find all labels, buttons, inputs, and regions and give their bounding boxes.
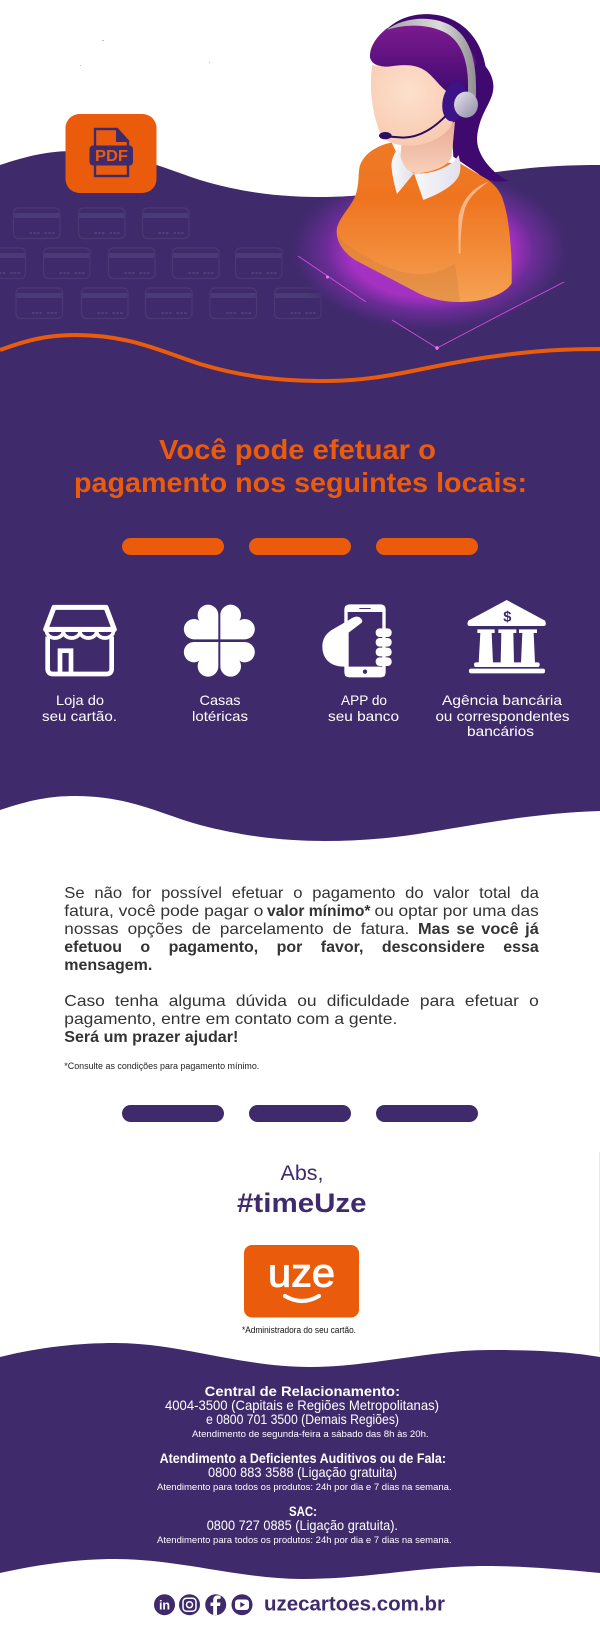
headset ear cup bbox=[454, 92, 478, 118]
title bbox=[74, 434, 527, 498]
text block: payment message: Caso tenha alguma dúvida ou dificuldade para efetuar o bbox=[64, 993, 539, 1010]
contact: central de relacionamento: Central de Relacionamento: bbox=[205, 1383, 400, 1399]
text block: payment message: nossas opções de parcelamento de fatura. bbox=[64, 921, 409, 938]
icon: bank bbox=[467, 600, 546, 673]
logo: uze bbox=[244, 1245, 359, 1318]
text block: payment message: Mas se você já bbox=[418, 921, 539, 938]
attendant front hair bbox=[370, 25, 477, 93]
stray pixels bbox=[80, 40, 210, 66]
PDF icon: PDF bbox=[95, 148, 128, 165]
sign-off: #timeUze bbox=[237, 1188, 367, 1218]
label: loja bbox=[42, 692, 117, 724]
headset band bbox=[387, 19, 476, 97]
background pattern: credit cards bbox=[0, 208, 321, 318]
icon: facebook bbox=[205, 1594, 226, 1615]
contact: deficientes auditivos: 0800 883 3588 (Ligação gratuita) bbox=[208, 1464, 397, 1480]
label: casas lotericas bbox=[192, 692, 248, 724]
icon: store bbox=[43, 607, 117, 674]
logo: uze: uze bbox=[268, 1252, 335, 1296]
logo caption: *Administradora do seu cartão. bbox=[242, 1325, 356, 1335]
attendant neck bbox=[400, 122, 455, 173]
label: agencia: bancários bbox=[467, 723, 534, 739]
label: agencia bbox=[436, 692, 570, 739]
attendant sleeve highlight bbox=[458, 182, 489, 253]
icon: youtube bbox=[232, 1594, 252, 1615]
label: app bbox=[328, 692, 399, 724]
illustration: call-center attendant with headset bbox=[337, 14, 512, 302]
label: agencia: ou correspondentes bbox=[436, 708, 570, 724]
attendant sweater shadow bbox=[337, 232, 460, 302]
attendant collar bbox=[391, 147, 460, 200]
contact: central de relacionamento: Atendimento de segunda-feira a sábado das 8h às 20h. bbox=[192, 1429, 429, 1440]
panel: contact footer bbox=[0, 1343, 600, 1579]
right edge hairline bbox=[599, 1152, 600, 1352]
text block: payment message: ou optar por uma das bbox=[374, 903, 539, 920]
footnote: *Consulte as condições para pagamento mínimo. bbox=[64, 1061, 259, 1071]
text block: payment message bbox=[64, 885, 539, 1046]
label: agencia: Agência bancária bbox=[442, 692, 562, 708]
orange pill dividers bbox=[122, 538, 478, 555]
text block: payment message: fatura, você pode pagar o bbox=[64, 903, 263, 920]
text block: payment message: Se não for possível efetuar o pagamento do valor total da bbox=[64, 885, 539, 902]
label: app: seu banco bbox=[328, 708, 399, 724]
sign-off bbox=[237, 1162, 367, 1218]
magenta diamond lines bbox=[298, 256, 564, 350]
contact: central de relacionamento: 4004-3500 (Capitais e Regiões Metropolitanas) bbox=[165, 1397, 439, 1413]
contact: SAC: Atendimento para todos os produtos: 24h por dia e 7 dias na semana. bbox=[157, 1535, 452, 1546]
label: loja: seu cartão. bbox=[42, 708, 117, 724]
text block: payment message: valor mínimo* bbox=[267, 903, 371, 920]
contact: SAC bbox=[157, 1503, 452, 1546]
text block: payment message: efetuou o pagamento, por favor, desconsidere essa bbox=[64, 939, 539, 956]
PDF icon bbox=[66, 114, 156, 193]
title: pagamento nos seguintes locais: bbox=[74, 467, 527, 498]
attendant sweater bbox=[337, 143, 512, 302]
panel: purple header and locations section bbox=[0, 151, 600, 841]
icon: four-leaf clover bbox=[184, 605, 255, 677]
text block: payment message: mensagem. bbox=[64, 957, 152, 974]
contact: central de relacionamento bbox=[165, 1383, 439, 1440]
icon: hand holding phone bbox=[322, 605, 392, 677]
label: app: APP do bbox=[341, 692, 387, 708]
title: Você pode efetuar o bbox=[159, 434, 436, 465]
contact: deficientes auditivos: Atendimento a Deficientes Auditivos ou de Fala: bbox=[160, 1450, 446, 1466]
icon: linkedin: in bbox=[159, 1598, 170, 1612]
sign-off: Abs, bbox=[280, 1162, 324, 1185]
icon: linkedin bbox=[154, 1594, 175, 1615]
icon: instagram bbox=[179, 1594, 200, 1615]
label: casas lotericas: Casas bbox=[200, 692, 240, 708]
text block: payment message: Será um prazer ajudar! bbox=[64, 1029, 238, 1046]
contact: central de relacionamento: e 0800 701 3500 (Demais Regiões) bbox=[206, 1411, 399, 1427]
label: loja: Loja do bbox=[56, 692, 104, 708]
contact: SAC: SAC: bbox=[289, 1503, 317, 1519]
purple pill dividers bbox=[122, 1105, 478, 1122]
label: casas lotericas: lotéricas bbox=[192, 708, 248, 724]
website url: uzecartoes.com.br bbox=[264, 1594, 445, 1616]
contact: deficientes auditivos: Atendimento para todos os produtos: 24h por dia e 7 dias na semana. bbox=[157, 1482, 452, 1493]
contact: SAC: 0800 727 0885 (Ligação gratuita). bbox=[207, 1517, 398, 1533]
icon: bank: $ bbox=[503, 609, 511, 625]
attendant face bbox=[371, 63, 455, 146]
contact: deficientes auditivos bbox=[157, 1450, 452, 1493]
orange wave line bbox=[0, 335, 600, 381]
purple glow behind attendant bbox=[298, 182, 561, 327]
headset ear pad bbox=[439, 80, 471, 124]
attendant back hair bbox=[387, 14, 508, 182]
headset microphone bbox=[379, 116, 446, 139]
text block: payment message: pagamento, entre em contato com a gente. bbox=[64, 1011, 397, 1028]
